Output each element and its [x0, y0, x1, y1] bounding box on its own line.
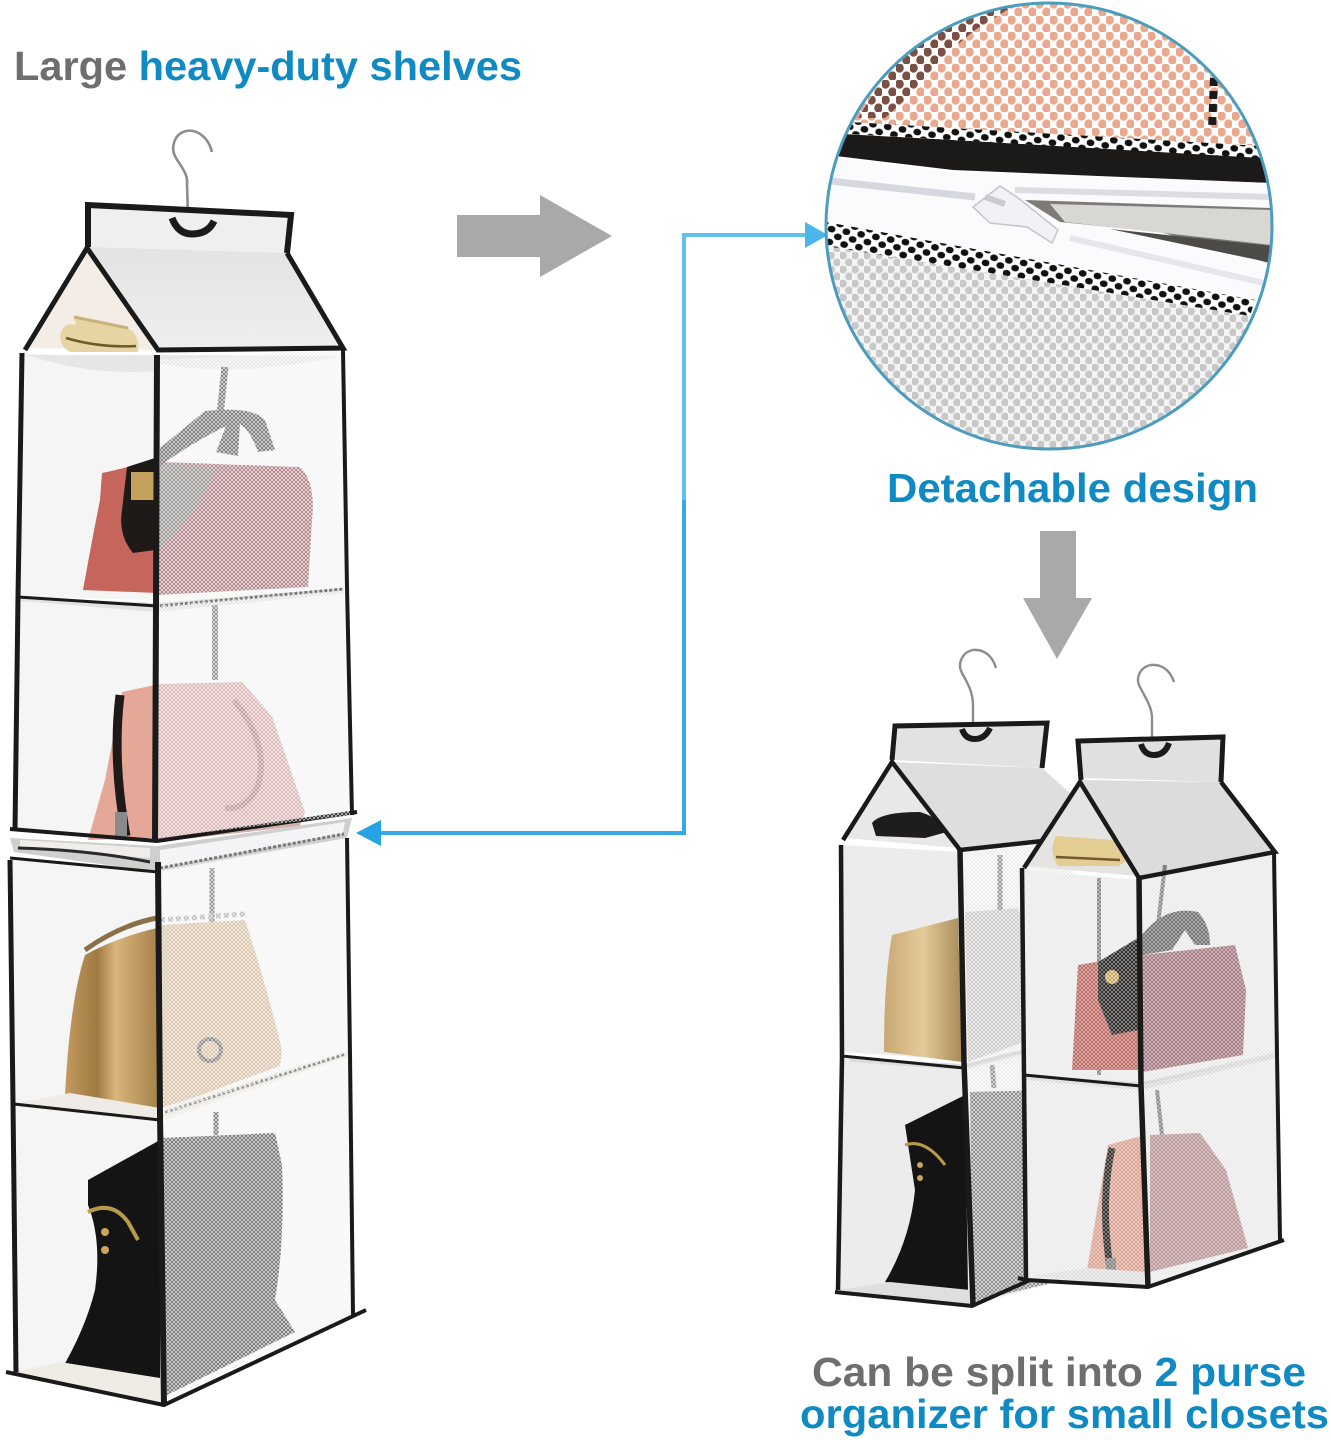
mesh overlay: [1023, 852, 1282, 1285]
mesh overlay on side panes: [157, 350, 353, 1400]
panes: [1023, 852, 1282, 1285]
pink bag: [1087, 1133, 1248, 1276]
red handbag: [83, 410, 313, 595]
strap 4: [214, 1112, 218, 1135]
roof face: [88, 247, 343, 350]
heading: large heavy-duty shelves: Large heavy-duty shelves: [14, 43, 522, 89]
black band: [836, 134, 1270, 183]
panes: [838, 835, 1085, 1305]
dark mesh corner: [858, 5, 1015, 118]
mesh overlay: [960, 835, 1085, 1305]
gable: [1026, 783, 1136, 876]
panes background: [10, 350, 353, 1400]
zipper teeth right: [1015, 190, 1270, 197]
compact purse on top shelf: [60, 317, 138, 352]
hook: [1138, 665, 1174, 744]
caption: split into two: [800, 1349, 1329, 1437]
gold handbag: [65, 914, 282, 1110]
edge binding: [835, 723, 1070, 1306]
circle outline: [826, 3, 1272, 449]
pink mesh upper: [853, 4, 1255, 146]
black mesh band upper: [850, 122, 1262, 158]
caption line 1: Can be split into 2 purse: [812, 1349, 1306, 1395]
shelf 1: [20, 588, 345, 612]
strap 2: [212, 605, 218, 680]
vertical black edge: [1212, 78, 1214, 130]
shelf 2 mesh edge: [165, 1054, 345, 1112]
edge binding: [1018, 737, 1284, 1287]
zipper detail circle: [820, 0, 1280, 460]
top band: [88, 205, 290, 253]
bottom shelf: [838, 1282, 972, 1305]
blue connector arrow: [356, 222, 828, 846]
organizer split: front unit: [1018, 665, 1284, 1287]
shelves: [850, 1036, 1075, 1070]
pink handbag: [88, 682, 305, 842]
roof: [892, 762, 1072, 850]
hook: [960, 650, 996, 726]
arrow: gray right: [457, 195, 612, 277]
inner roll: [1050, 204, 1272, 245]
strap 3: [210, 868, 214, 925]
bottom shelf: [1030, 1268, 1148, 1287]
organizer split: rear unit: [835, 650, 1085, 1306]
strap 1: [220, 367, 225, 415]
lower zipper teeth: [1070, 238, 1268, 284]
shelf 1 mesh edge: [160, 589, 344, 606]
zipper teeth left: [830, 181, 975, 197]
black edge binding: [6, 205, 366, 1405]
black bag: [885, 1090, 1085, 1302]
bottom shelf: [16, 1362, 164, 1404]
roof: [1081, 780, 1275, 878]
under-shelf fabric: [27, 355, 340, 372]
red bag: [1072, 911, 1246, 1072]
gold bag: [884, 908, 1058, 1062]
arrow: gray down: [1023, 531, 1092, 659]
hook: [173, 131, 212, 214]
gable: [846, 764, 958, 848]
band: [892, 723, 1047, 768]
gray mesh lower: [828, 246, 1251, 448]
shelf 2: [13, 1050, 350, 1122]
straps: [992, 855, 1000, 1088]
zipper pull: [973, 186, 1058, 243]
black mesh strip: [826, 222, 1255, 316]
black handbag: [60, 1133, 295, 1395]
mid shelf: [1024, 1052, 1277, 1090]
gold compact: [1052, 836, 1125, 866]
opening shadow: [1110, 229, 1272, 263]
zipper opening: [1025, 200, 1272, 264]
black clutch: [872, 812, 947, 838]
arrowhead lower: [356, 820, 381, 846]
tall hanging organizer: [6, 131, 366, 1405]
gable: [27, 250, 156, 350]
arrowhead upper: [805, 222, 828, 248]
heading: detachable design: Detachable design: [887, 465, 1258, 511]
strap: [1099, 865, 1165, 1135]
white zipper tape: [1223, 181, 1266, 183]
band: [1078, 737, 1223, 782]
zipper seam between modules: [10, 812, 357, 872]
caption line 2: organizer for small closets: [800, 1391, 1329, 1437]
